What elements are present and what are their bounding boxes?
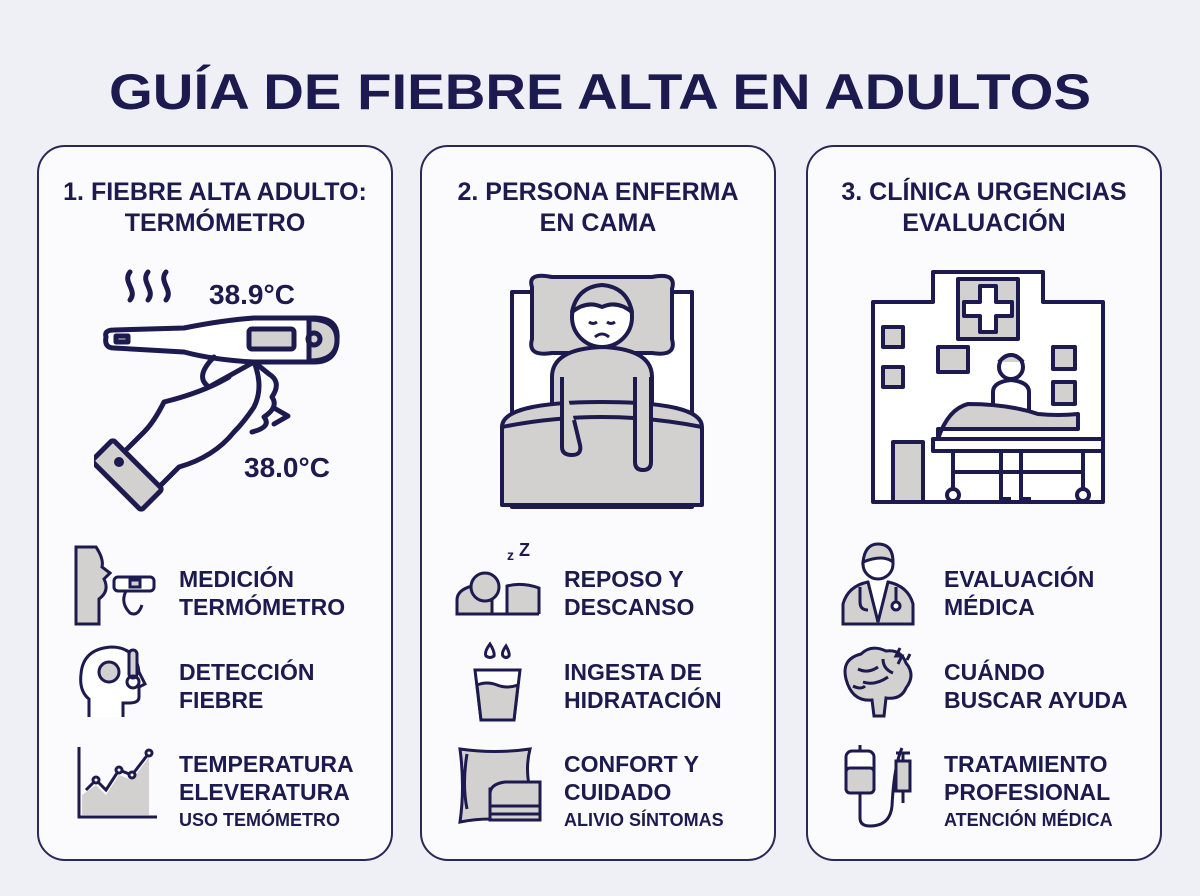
text: MÉDICA (944, 594, 1035, 620)
heading 1 (63, 178, 367, 237)
text: CUIDADO (564, 779, 671, 805)
item: confort (458, 747, 724, 830)
text (944, 751, 1113, 830)
heading 2: 2. PERSONA ENFERMA (457, 178, 739, 206)
text: HIDRATACIÓN (564, 687, 722, 713)
illustration: hand with thermometer: 38.0°C (244, 452, 330, 483)
text: FIEBRE (179, 687, 263, 713)
item: hidratación (473, 641, 722, 722)
text (179, 751, 354, 830)
text (179, 566, 345, 620)
text: REPOSO Y (564, 566, 684, 592)
icon: sleeping: z (507, 547, 514, 563)
item: medición (74, 546, 345, 626)
illustration: person in bed (500, 274, 704, 509)
text: ELEVERATURA (179, 779, 350, 805)
text (944, 659, 1128, 713)
text (944, 566, 1094, 620)
icon: sleeping (456, 542, 540, 616)
text: ALIVIO SÍNTOMAS (564, 810, 724, 830)
icon: face thermometer (74, 546, 156, 626)
icon: IV drip (844, 745, 912, 828)
illustration: hand with thermometer: 38.9°C (209, 279, 295, 310)
text: CONFORT Y (564, 751, 699, 777)
text: BUSCAR AYUDA (944, 687, 1128, 713)
item: tratamiento (844, 745, 1113, 830)
item: temperatura (78, 747, 354, 830)
text: CUÁNDO (944, 659, 1045, 685)
heading 2: EN CAMA (540, 209, 656, 237)
text (564, 659, 722, 713)
icon: pillow and blanket (458, 747, 542, 824)
icon: glass of water (473, 641, 522, 722)
panel: clínica (806, 145, 1162, 861)
icon: brain (844, 646, 913, 718)
heading 3: EVALUACIÓN (902, 209, 1066, 237)
text: DETECCIÓN (179, 659, 314, 685)
text: EVALUACIÓN (944, 566, 1094, 592)
text (564, 751, 724, 830)
illustration: clinic (871, 270, 1105, 504)
heading 2 (457, 178, 739, 237)
text: DESCANSO (564, 594, 694, 620)
item: evaluación médica (842, 542, 1094, 626)
illustration: hand with thermometer (94, 270, 340, 512)
heading 1: 1. FIEBRE ALTA ADULTO: (63, 178, 367, 206)
text: TERMÓMETRO (179, 594, 345, 620)
item: cuándo buscar ayuda (844, 646, 1128, 718)
icon: head thermometer (79, 646, 147, 717)
text (179, 659, 314, 713)
heading 3: 3. CLÍNICA URGENCIAS (841, 178, 1127, 206)
text (564, 566, 694, 620)
item: reposo (456, 542, 694, 620)
text: TEMPERATURA (179, 751, 354, 777)
panel: fiebre alta (37, 145, 393, 861)
heading 1: TERMÓMETRO (125, 209, 305, 237)
item: detección (79, 646, 314, 717)
text: MEDICIÓN (179, 566, 294, 592)
text: PROFESIONAL (944, 779, 1110, 805)
text: INGESTA DE (564, 659, 702, 685)
text: ATENCIÓN MÉDICA (944, 810, 1113, 830)
icon: line chart (78, 747, 157, 818)
panel: persona enferma (420, 145, 776, 861)
text: USO TEMÓMETRO (179, 810, 340, 830)
text: TRATAMIENTO (944, 751, 1108, 777)
heading 3 (841, 178, 1127, 237)
title: GUÍA DE FIEBRE ALTA EN ADULTOS (109, 64, 1091, 120)
icon: doctor (842, 542, 914, 626)
